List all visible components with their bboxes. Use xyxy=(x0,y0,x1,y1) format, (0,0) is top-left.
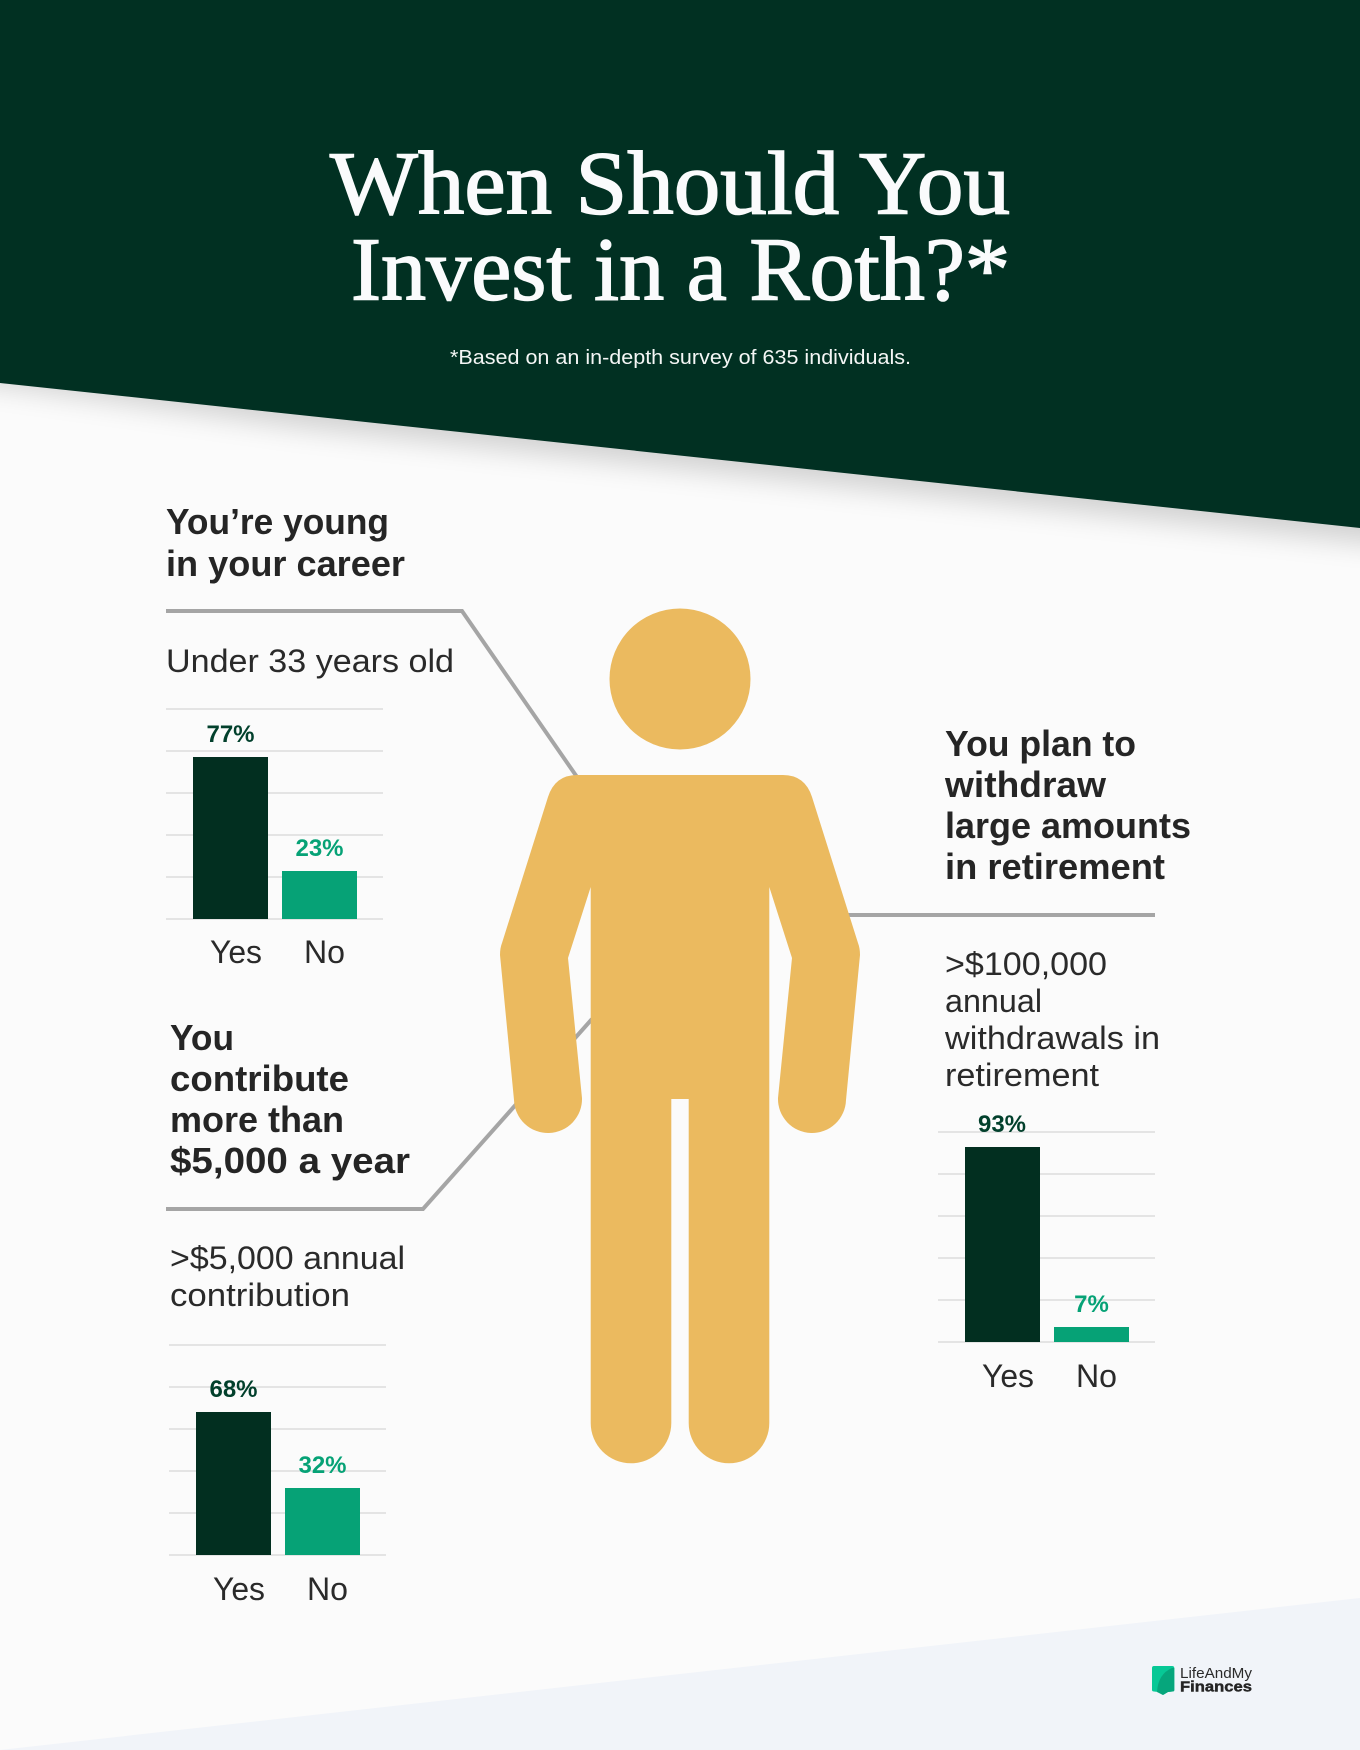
leader line: contributions xyxy=(166,1019,592,1209)
subtitle: annual withdrawals xyxy=(944,946,1160,1093)
title: Invest in a Roth?* xyxy=(351,220,1010,320)
heading: contributions xyxy=(170,1017,410,1181)
subtitle: annual contribution: contribution xyxy=(170,1277,350,1313)
icon: person figure xyxy=(500,608,860,1463)
bar chart: under 33: 23% xyxy=(295,835,344,862)
heading: contributions: contribute xyxy=(170,1058,349,1099)
bar chart: withdrawals: Yes xyxy=(982,1358,1034,1394)
header band xyxy=(0,0,1360,528)
logo: LifeAndMy Finances: LifeAndMy xyxy=(1180,1665,1253,1682)
leader line: withdrawals xyxy=(845,913,1155,917)
heading: withdrawals xyxy=(944,723,1191,887)
heading: withdrawals: in retirement xyxy=(945,846,1165,887)
logo: LifeAndMy Finances xyxy=(1152,1665,1253,1696)
bar chart: contributions: No xyxy=(307,1571,348,1607)
heading: contributions: You xyxy=(170,1017,234,1058)
heading: young in career: You’re young xyxy=(166,501,389,542)
bar chart: contributions xyxy=(169,1345,386,1607)
heading: contributions: more than xyxy=(170,1099,344,1140)
panel: contributions xyxy=(169,1017,410,1607)
heading: contributions: $5,000 a year xyxy=(170,1140,410,1181)
subtitle: annual contribution: >$5,000 annual xyxy=(170,1240,405,1276)
heading: withdrawals: withdraw xyxy=(944,764,1107,805)
heading: withdrawals: You plan to xyxy=(945,723,1136,764)
leader line: young in career xyxy=(166,611,577,777)
bar chart: withdrawals xyxy=(938,1111,1155,1394)
bar chart: contributions: 32% xyxy=(298,1452,347,1479)
title: When Should You xyxy=(330,134,1010,234)
heading: withdrawals: large amounts xyxy=(945,805,1191,846)
bar chart: under 33 xyxy=(166,709,383,970)
logo: LifeAndMy Finances: Finances xyxy=(1180,1680,1252,1696)
subtitle: under 33: Under 33 years old xyxy=(166,643,454,679)
panel: young in career xyxy=(166,501,454,970)
survey footnote: *Based on an in-depth survey of 635 individuals. xyxy=(450,347,911,369)
bar chart: contributions: 68% xyxy=(209,1376,258,1403)
bar chart: under 33: Yes xyxy=(210,934,262,970)
subtitle: annual withdrawals: >$100,000 xyxy=(945,946,1107,982)
bar chart: contributions: Yes xyxy=(213,1571,265,1607)
subtitle: annual withdrawals: withdrawals in xyxy=(944,1020,1160,1056)
subtitle: annual contribution xyxy=(170,1240,405,1313)
subtitle: annual withdrawals: retirement xyxy=(945,1057,1099,1093)
heading: young in career xyxy=(166,501,405,584)
bar chart: withdrawals: 93% xyxy=(978,1111,1026,1138)
bar chart: under 33: No xyxy=(304,934,345,970)
bar chart: withdrawals: 7% xyxy=(1074,1291,1109,1318)
heading: young in career: in your career xyxy=(166,543,405,584)
panel: withdrawals xyxy=(938,723,1191,1394)
subtitle: annual withdrawals: annual xyxy=(945,983,1042,1019)
bar chart: withdrawals: No xyxy=(1076,1358,1117,1394)
bar chart: under 33: 77% xyxy=(206,721,255,748)
title xyxy=(330,134,1010,320)
